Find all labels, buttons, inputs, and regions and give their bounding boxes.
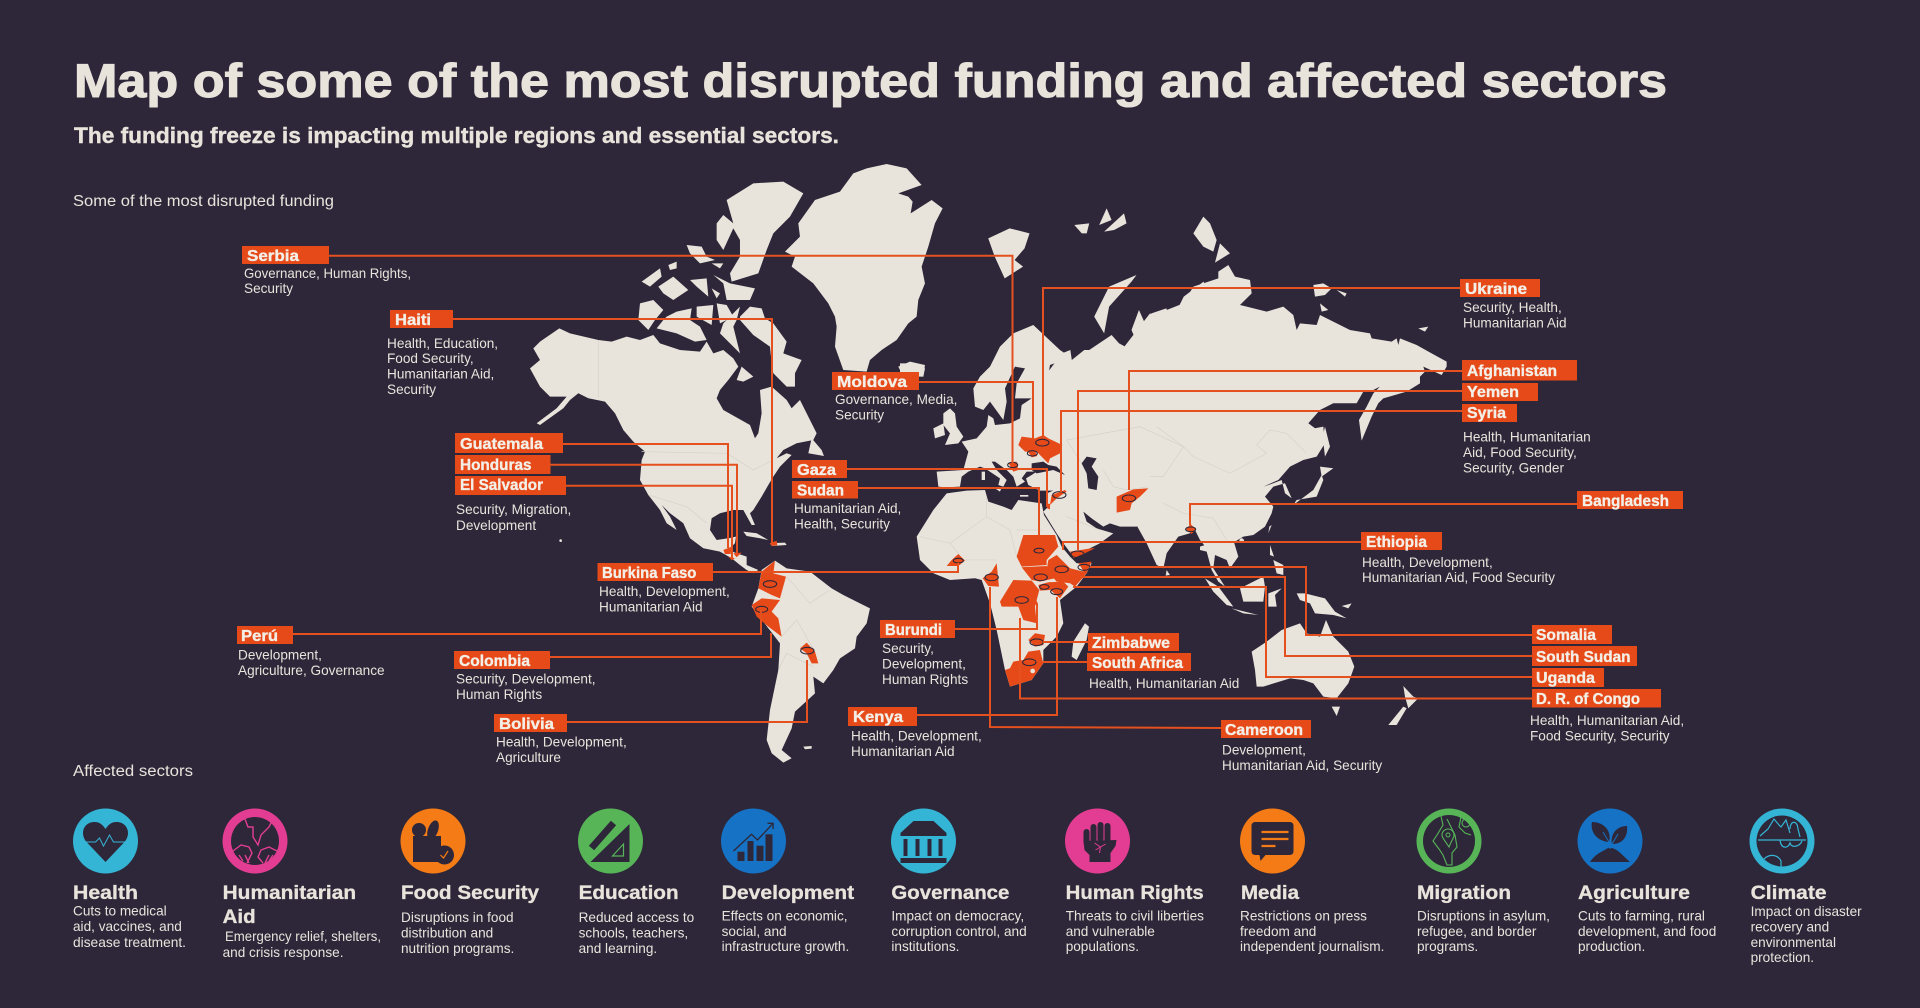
callout: Kenya: Kenya bbox=[853, 709, 903, 726]
callout: Serbia: Serbia bbox=[247, 248, 299, 265]
sector: Governance bbox=[891, 808, 1027, 954]
sector: Climate: recovery and bbox=[1751, 920, 1829, 934]
icon: raised fist bbox=[1065, 808, 1130, 874]
sector: Humanitarian Aid: Aid bbox=[223, 907, 256, 928]
callout: Ukraine bbox=[1460, 279, 1567, 330]
callout: Haiti: Haiti bbox=[395, 312, 431, 329]
sector: Media: freedom and bbox=[1240, 924, 1316, 939]
callout: Haiti bbox=[387, 310, 498, 397]
land: Siberia and northern islands bbox=[988, 208, 1238, 417]
callout: Burundi: Human Rights bbox=[882, 672, 968, 687]
icon: speech bubble bbox=[1240, 808, 1305, 874]
callout: Gaza and Sudan: Health, Security bbox=[794, 516, 890, 532]
callout: Bangladesh: Bangladesh bbox=[1582, 493, 1669, 510]
callout: Kenya: Humanitarian Aid bbox=[851, 744, 955, 759]
sector: Media bbox=[1240, 808, 1384, 954]
callout: Cameroon bbox=[1221, 720, 1382, 773]
callout: Afghanistan, Yemen, Syria: Aid, Food Security, bbox=[1463, 445, 1577, 460]
highlighted countries: Africa, Europe, Asia bbox=[947, 435, 1196, 687]
sector: Health: disease treatment. bbox=[73, 935, 186, 950]
callout: Moldova: Moldova bbox=[837, 374, 907, 391]
sector: Agriculture: production. bbox=[1578, 939, 1645, 954]
sector: Agriculture bbox=[1578, 808, 1716, 954]
callout: Somalia, South Sudan, Uganda, D. R. of Congo: Health, Humanitarian Aid, bbox=[1530, 713, 1684, 728]
callout: Afghanistan, Yemen, Syria: Security, Gender bbox=[1463, 460, 1564, 476]
sector: Health bbox=[73, 808, 186, 950]
sector: Agriculture: development, and food bbox=[1578, 924, 1716, 939]
sector: Humanitarian Aid: Emergency relief, shelters, bbox=[225, 929, 381, 944]
sector: Agriculture: Agriculture bbox=[1578, 883, 1690, 904]
sector: Migration bbox=[1416, 808, 1550, 954]
sector: Migration: Disruptions in asylum, bbox=[1417, 908, 1550, 924]
sector: Climate bbox=[1750, 808, 1862, 965]
callout: Haiti: Health, Education, bbox=[387, 336, 498, 351]
land: North America and Arctic bbox=[530, 164, 943, 573]
callout: Serbia bbox=[242, 246, 411, 296]
sector: Agriculture: Cuts to farming, rural bbox=[1578, 908, 1705, 924]
callout: Afghanistan, Yemen, Syria bbox=[1462, 360, 1591, 476]
sector: Governance: Impact on democracy, bbox=[891, 908, 1024, 924]
leader lines bbox=[293, 256, 1577, 728]
callout: Zimbabwe and South Africa bbox=[1087, 633, 1239, 691]
land: South America bbox=[752, 561, 870, 763]
callout: Perú: Development, bbox=[238, 648, 322, 662]
sector: Climate: environmental bbox=[1751, 935, 1836, 950]
sector: Health: Health bbox=[73, 883, 138, 904]
callout: Colombia: Human Rights bbox=[456, 687, 542, 702]
callout: Guatemala, Honduras, El Salvador: Security, Migration, bbox=[456, 502, 571, 517]
sector: Humanitarian Aid: and crisis response. bbox=[223, 945, 343, 960]
callout: Haiti: Security bbox=[387, 382, 436, 397]
callout: Gaza and Sudan bbox=[792, 460, 901, 532]
sector: Food Security bbox=[400, 808, 539, 956]
highlighted countries: South America bbox=[752, 561, 818, 663]
callout: Moldova: Security bbox=[835, 408, 884, 422]
callout: Afghanistan, Yemen, Syria: Yemen bbox=[1467, 384, 1519, 401]
callout: Burundi bbox=[880, 620, 968, 687]
sector: Migration: refugee, and border bbox=[1417, 924, 1537, 939]
callout: Haiti: Humanitarian Aid, bbox=[387, 366, 494, 382]
callout: Zimbabwe and South Africa: Health, Humanitarian Aid bbox=[1089, 676, 1239, 691]
callout: Serbia: Governance, Human Rights, bbox=[244, 266, 411, 281]
icon: grocery bag bbox=[400, 808, 466, 874]
sector: Food Security: Disruptions in food bbox=[401, 910, 514, 925]
sector: Migration: programs. bbox=[1417, 939, 1478, 954]
callout: Ukraine: Ukraine bbox=[1465, 281, 1527, 298]
sector: Development: Effects on economic, bbox=[722, 908, 848, 924]
sector: Media: Restrictions on press bbox=[1240, 908, 1367, 924]
icon: hands holding globe bbox=[222, 808, 288, 874]
land: Africa bbox=[917, 490, 1092, 687]
callout: Bolivia bbox=[494, 714, 627, 765]
sector: Governance: Governance bbox=[891, 883, 1009, 904]
subtitle: The funding freeze is impacting multiple regions and essential sectors. bbox=[74, 123, 839, 148]
callout: Perú: Agriculture, Governance bbox=[238, 663, 385, 678]
callout: Kenya bbox=[848, 707, 982, 759]
callout: Afghanistan, Yemen, Syria: Syria bbox=[1467, 405, 1506, 422]
callout: Guatemala, Honduras, El Salvador bbox=[455, 433, 571, 533]
sector: Human Rights: and vulnerable bbox=[1066, 924, 1155, 939]
callout: Afghanistan, Yemen, Syria: Afghanistan bbox=[1467, 363, 1557, 380]
sector: Education bbox=[578, 808, 694, 956]
callout: Bolivia: Agriculture bbox=[496, 750, 561, 765]
callout: Afghanistan, Yemen, Syria: Health, Humanitarian bbox=[1463, 430, 1591, 444]
callout: Ethiopia: Humanitarian Aid, Food Security bbox=[1362, 570, 1555, 585]
icon: government building bbox=[891, 808, 956, 874]
sector: Humanitarian Aid bbox=[222, 808, 381, 960]
callout: Burundi: Security, bbox=[882, 641, 934, 656]
icon: heart with pulse bbox=[73, 808, 138, 874]
land: Europe and western Asia bbox=[900, 325, 1233, 557]
callout: Cameroon: Humanitarian Aid, Security bbox=[1222, 758, 1382, 773]
callout: Haiti: Food Security, bbox=[387, 351, 474, 366]
sector: Migration: Migration bbox=[1417, 883, 1511, 904]
sector: Health: Cuts to medical bbox=[73, 904, 167, 918]
sector: Climate: Climate bbox=[1751, 883, 1827, 904]
callout: Somalia, South Sudan, Uganda, D. R. of Congo bbox=[1530, 625, 1684, 744]
icon: globe with location pins bbox=[1416, 808, 1482, 874]
callout: Perú bbox=[237, 626, 385, 678]
sector: Climate: protection. bbox=[1751, 950, 1814, 965]
callout: Guatemala, Honduras, El Salvador: El Salvador bbox=[460, 477, 543, 494]
icon: sprout in soil bbox=[1578, 808, 1642, 874]
callout: Colombia: Security, Development, bbox=[456, 672, 596, 686]
callout: Ukraine: Security, Health, bbox=[1463, 300, 1562, 315]
sector: Education: Education bbox=[579, 883, 679, 904]
callout: Bolivia: Bolivia bbox=[499, 716, 554, 733]
callout: Cameroon: Development, bbox=[1222, 742, 1306, 758]
sector: Development: Development bbox=[722, 883, 855, 904]
callout: Serbia: Security bbox=[244, 281, 293, 296]
sector: Media: independent journalism. bbox=[1240, 939, 1384, 954]
callout: Burkina Faso: Humanitarian Aid bbox=[599, 600, 703, 614]
Sri Lanka and Indian Ocean details bbox=[1166, 570, 1170, 576]
callout: Guatemala, Honduras, El Salvador: Guatemala bbox=[460, 436, 543, 453]
sector: Human Rights: Human Rights bbox=[1066, 883, 1204, 904]
callout: Zimbabwe and South Africa: South Africa bbox=[1092, 655, 1183, 672]
sector: Food Security: Food Security bbox=[401, 883, 539, 904]
world map bbox=[530, 164, 1447, 763]
callout: Moldova bbox=[832, 372, 957, 422]
sector: Food Security: nutrition programs. bbox=[401, 941, 514, 956]
sector: Food Security: distribution and bbox=[401, 926, 493, 940]
callout: Guatemala, Honduras, El Salvador: Honduras bbox=[460, 457, 532, 474]
callout: Somalia, South Sudan, Uganda, D. R. of Congo: D. R. of Congo bbox=[1536, 691, 1640, 708]
callout: Ethiopia: Ethiopia bbox=[1366, 534, 1427, 551]
title: Map of some of the most disrupted funding and affected sectors bbox=[74, 54, 1667, 107]
section heading: affected sectors: Affected sectors bbox=[73, 763, 193, 780]
sector: Human Rights: Threats to civil liberties bbox=[1066, 908, 1204, 924]
sector: Development bbox=[721, 808, 855, 954]
callout: Zimbabwe and South Africa: Zimbabwe bbox=[1092, 635, 1170, 652]
callout: Somalia, South Sudan, Uganda, D. R. of Congo: Uganda bbox=[1536, 670, 1595, 687]
highlighted countries: Central America and Caribbean bbox=[723, 541, 777, 560]
sector: Education: and learning. bbox=[579, 941, 657, 956]
callout: Ethiopia: Health, Development, bbox=[1362, 555, 1493, 570]
callout: Somalia, South Sudan, Uganda, D. R. of Congo: South Sudan bbox=[1536, 649, 1630, 666]
callout: Gaza and Sudan: Gaza bbox=[797, 462, 836, 479]
callout: Guatemala, Honduras, El Salvador: Development bbox=[456, 518, 536, 533]
icon: earth with mountains and water bbox=[1750, 808, 1814, 874]
sector: Education: schools, teachers, bbox=[579, 926, 688, 940]
sector: Governance: institutions. bbox=[891, 939, 959, 954]
callout: Burundi: Burundi bbox=[885, 622, 942, 639]
callout: Burundi: Development, bbox=[882, 656, 966, 672]
land: Asia bbox=[1117, 217, 1447, 568]
callout: Gaza and Sudan: Humanitarian Aid, bbox=[794, 501, 901, 516]
callout: Ethiopia bbox=[1361, 532, 1555, 585]
callout: Cameroon: Cameroon bbox=[1225, 722, 1303, 739]
land: Southeast Asia and Oceania bbox=[1193, 480, 1418, 725]
sector: Development: infrastructure growth. bbox=[722, 939, 849, 954]
sector: Development: social, and bbox=[722, 924, 787, 939]
callout: Perú: Perú bbox=[241, 628, 278, 645]
sector: Human Rights: populations. bbox=[1066, 939, 1139, 954]
callout: Burkina Faso: Burkina Faso bbox=[602, 565, 697, 582]
sector: Human Rights bbox=[1065, 808, 1204, 954]
sector: Health: aid, vaccines, and bbox=[73, 919, 182, 934]
sector: Climate: Impact on disaster bbox=[1751, 904, 1862, 919]
callout: Moldova: Governance, Media, bbox=[835, 392, 957, 407]
callout: Gaza and Sudan: Sudan bbox=[797, 482, 844, 500]
section heading: disrupted funding: Some of the most disrupted funding bbox=[73, 193, 334, 210]
sector: Education: Reduced access to bbox=[579, 910, 694, 925]
callout: Colombia bbox=[454, 651, 596, 702]
callout: Burkina Faso bbox=[598, 563, 730, 614]
sector: Humanitarian Aid: Humanitarian bbox=[223, 883, 356, 904]
callout: Bolivia: Health, Development, bbox=[496, 734, 627, 750]
callout: Colombia: Colombia bbox=[459, 653, 530, 670]
icon: rising bar chart bbox=[721, 808, 786, 874]
callout: Ukraine: Humanitarian Aid bbox=[1463, 316, 1567, 330]
sector: Media: Media bbox=[1241, 883, 1299, 904]
icon: pencil and set square bbox=[578, 808, 643, 874]
sector: Governance: corruption control, and bbox=[891, 924, 1027, 939]
callout: Kenya: Health, Development, bbox=[851, 728, 982, 744]
callout: Somalia, South Sudan, Uganda, D. R. of Congo: Food Security, Security bbox=[1530, 728, 1670, 744]
callout: Somalia, South Sudan, Uganda, D. R. of Congo: Somalia bbox=[1536, 627, 1596, 644]
callout: Burkina Faso: Health, Development, bbox=[599, 584, 730, 599]
